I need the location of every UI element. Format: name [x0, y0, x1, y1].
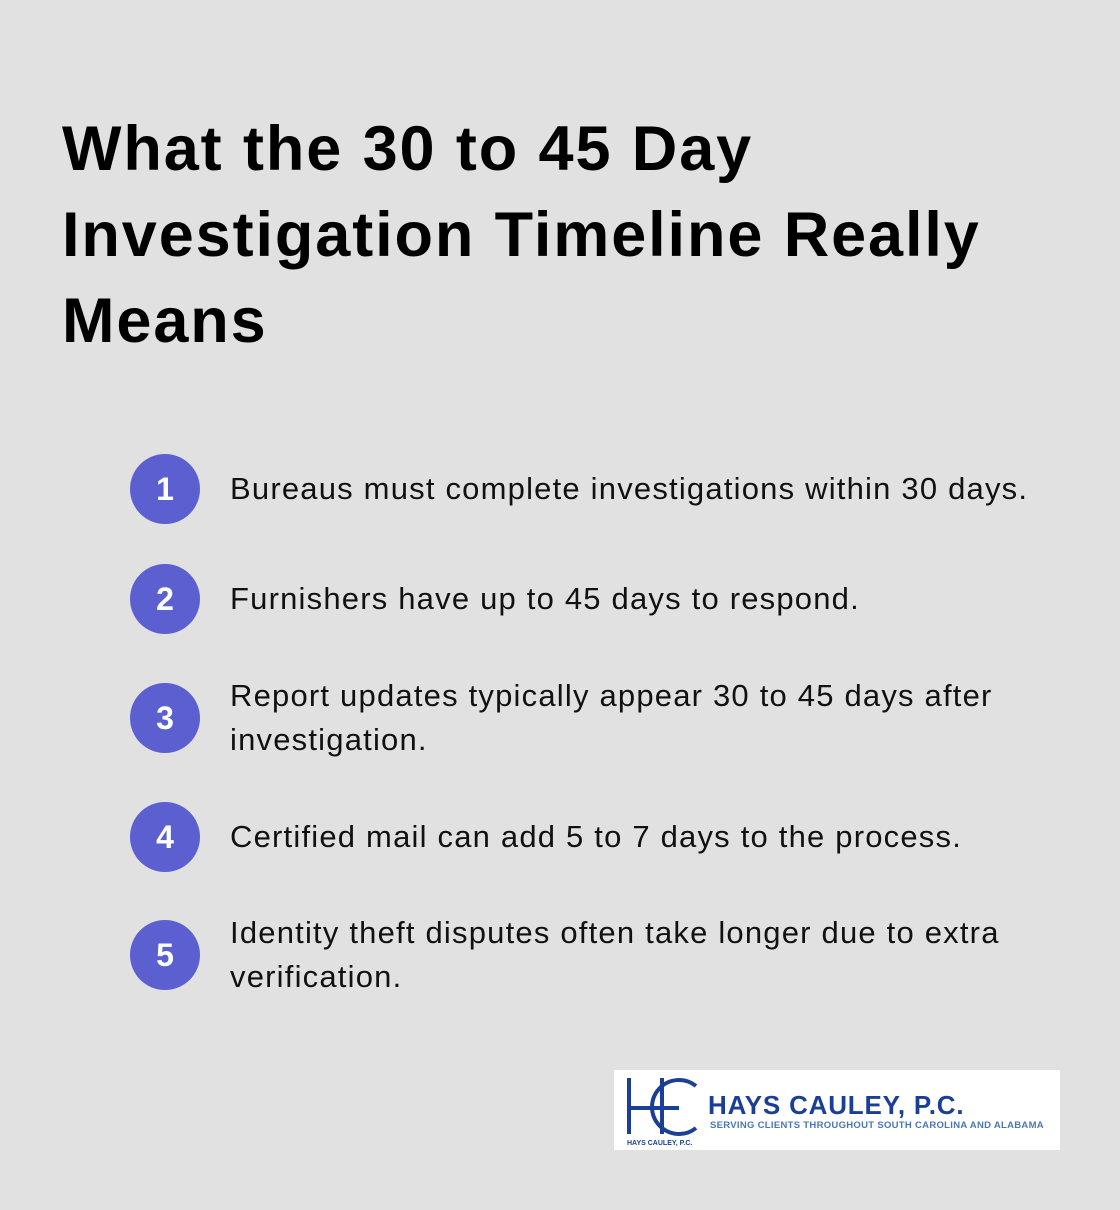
- icon: HC monogram: [627, 1078, 698, 1136]
- title: What the 30 to 45 Day Investigation Timeline Really Means: [62, 114, 981, 356]
- item 4: Certified mail can add 5 to 7 days to the process.: [230, 819, 962, 854]
- logo: HAYS CAULEY, P.C.: [708, 1090, 964, 1120]
- item 2: Furnishers have up to 45 days to respond.: [230, 581, 860, 616]
- logo: [614, 1070, 1060, 1150]
- item 1: 1: [156, 471, 174, 507]
- item 1: Bureaus must complete investigations within 30 days.: [230, 471, 1028, 506]
- item 3: 3: [156, 700, 174, 736]
- item 4: 4: [156, 819, 174, 855]
- item 2: 2: [156, 581, 174, 617]
- logo: SERVING CLIENTS THROUGHOUT SOUTH CAROLINA AND ALABAMA: [710, 1120, 1044, 1131]
- item 5: Identity theft disputes often take longer due to extra verification.: [230, 915, 1000, 994]
- logo: HAYS CAULEY, P.C.: [627, 1140, 692, 1147]
- item 4: [130, 802, 962, 872]
- item 2: [130, 564, 860, 634]
- item 5: 5: [156, 937, 174, 973]
- item 3: Report updates typically appear 30 to 45 days after investigation.: [230, 678, 993, 757]
- item 1: [130, 454, 1028, 524]
